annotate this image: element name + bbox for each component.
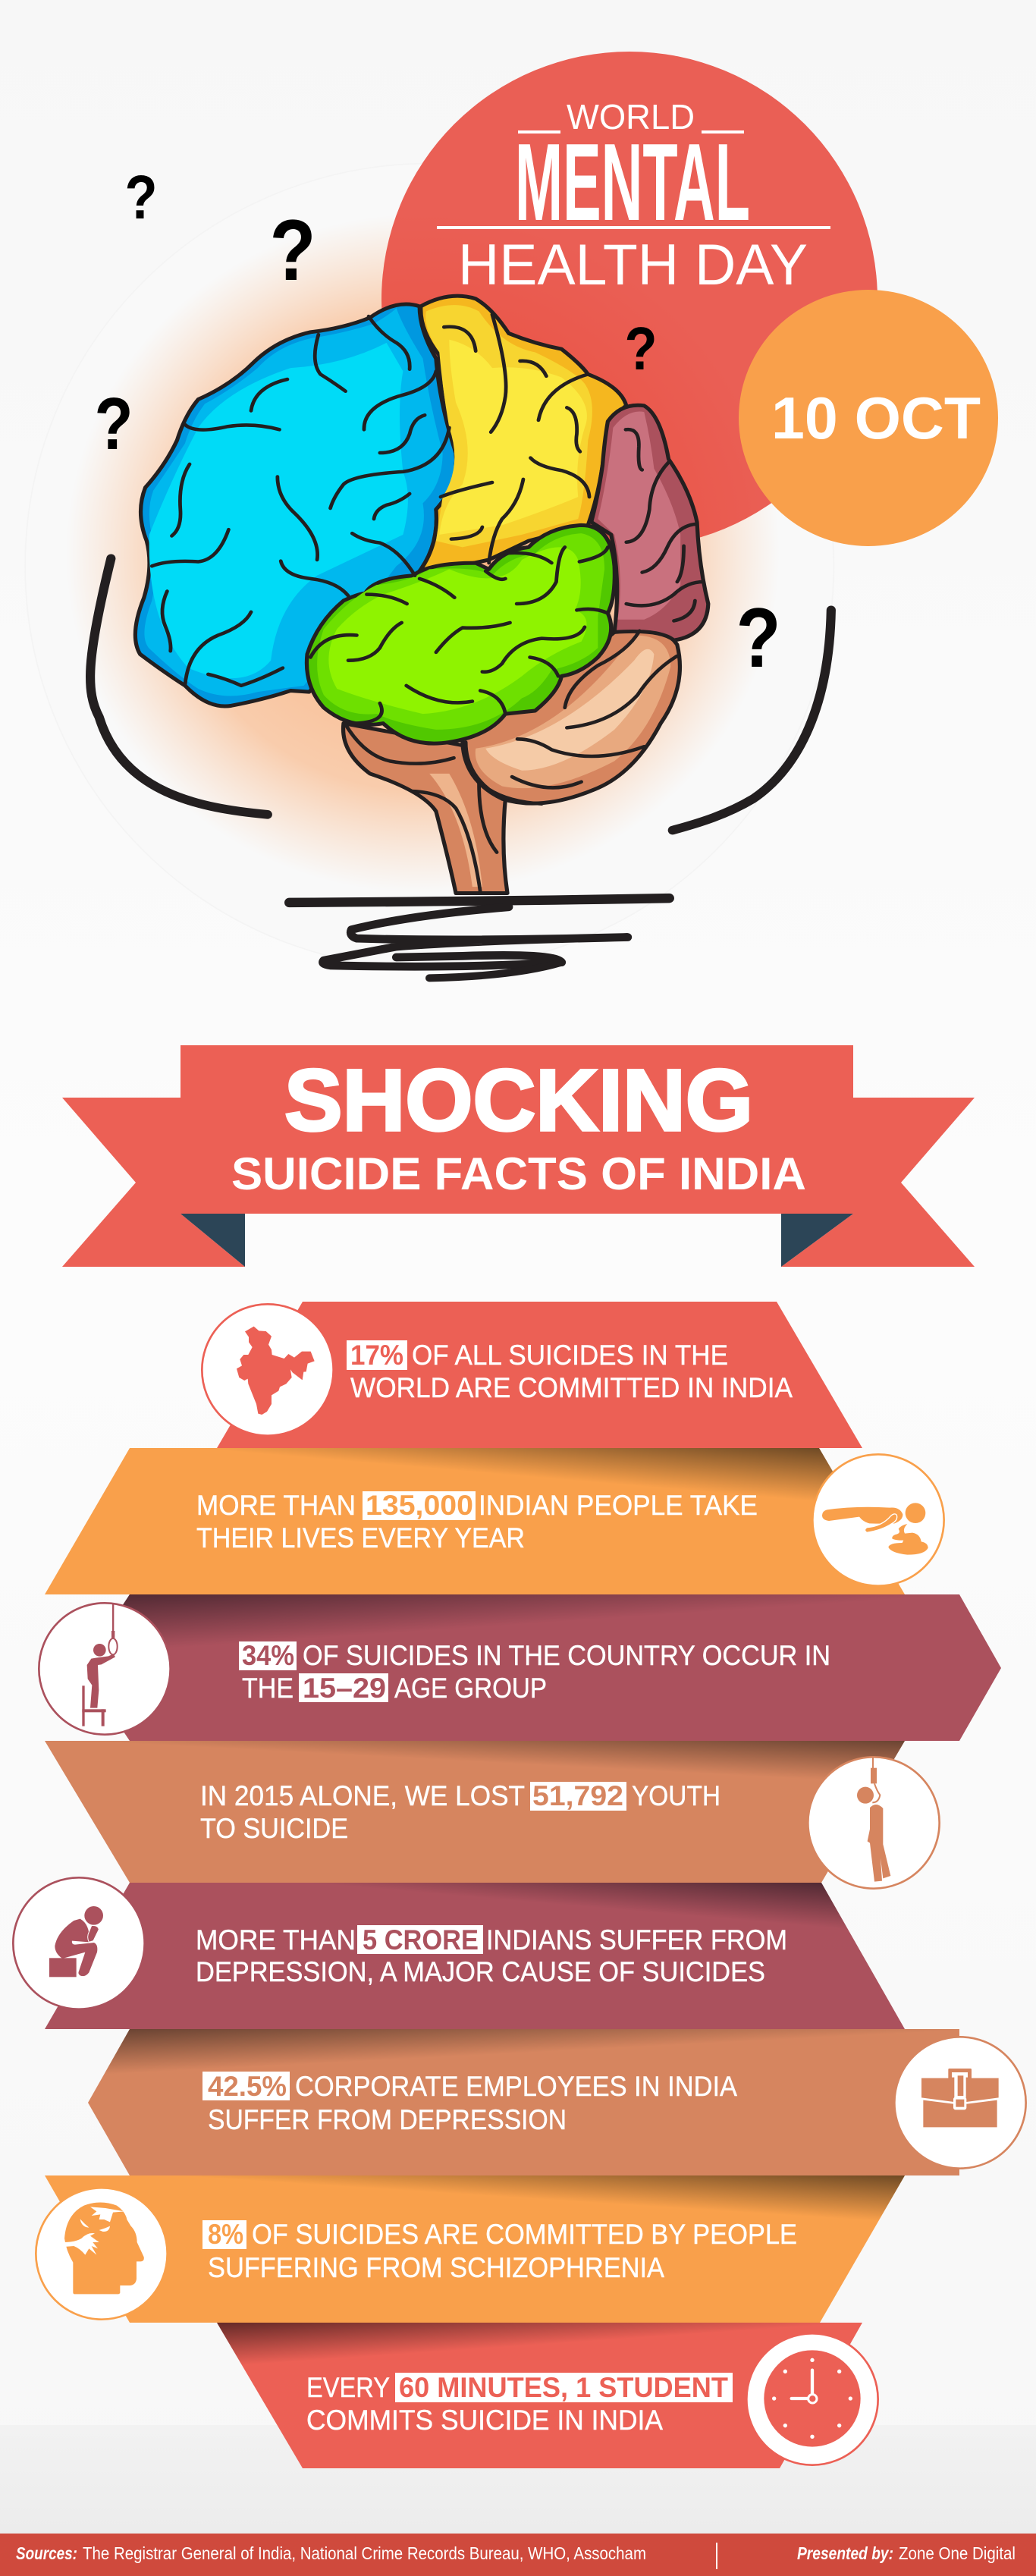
question marks: [94, 163, 781, 685]
question marks: ?: [270, 203, 316, 299]
fact 1 text: [347, 1340, 793, 1403]
fact 5 text: INDIANS SUFFER FROM: [486, 1924, 787, 1956]
brain fold lines: [152, 315, 704, 892]
fact 1 text: 17%: [350, 1340, 403, 1371]
fact 7 text: OF SUICIDES ARE COMMITTED BY PEOPLE: [252, 2219, 797, 2250]
green lobe: [306, 525, 614, 743]
fact 4 text: IN 2015 ALONE, WE LOST: [200, 1780, 525, 1811]
fact bars: [45, 1302, 1001, 2468]
question marks: ?: [736, 591, 781, 685]
date badge: 10 Oct: 10 OCT: [771, 385, 981, 451]
fact 8 text: [306, 2372, 733, 2436]
footer: sources and presenter: Presented by:: [797, 2543, 893, 2563]
heading ribbon: SUICIDE FACTS OF INDIA: [231, 1148, 806, 1199]
icon: hanging figure: [808, 1757, 940, 1889]
title: World Mental Health Day: HEALTH DAY: [458, 233, 808, 297]
fact 7 text: 8%: [208, 2219, 243, 2250]
icon: person on chair with noose: [39, 1603, 171, 1735]
question marks: ?: [124, 163, 158, 232]
title: World Mental Health Day: MENTAL: [515, 121, 750, 243]
yellow lobe: [416, 296, 626, 576]
icon: depressed seated figure: [13, 1877, 145, 2009]
fact 3 text: THE: [242, 1673, 294, 1704]
title: World Mental Health Day: WORLD: [567, 97, 695, 137]
fact 3 text: AGE GROUP: [394, 1673, 547, 1704]
date badge: 10 Oct: [739, 290, 998, 546]
title: World Mental Health Day: [437, 97, 830, 297]
mauve lobe: [592, 405, 708, 640]
fact 8 text: 60 MINUTES, 1 STUDENT: [399, 2372, 728, 2403]
fact 2 text: 135,000: [366, 1490, 473, 1521]
fact 4 text: 51,792: [532, 1780, 623, 1811]
fact 2 text: [196, 1490, 758, 1553]
question marks: ?: [625, 315, 657, 382]
fact 6 text: CORPORATE EMPLOYEES IN INDIA: [295, 2071, 737, 2102]
brain glow: [66, 214, 780, 893]
fact 5 text: DEPRESSION, A MAJOR CAUSE OF SUICIDES: [196, 1956, 765, 1987]
fact 3 text: 15–29: [303, 1673, 386, 1704]
fact 8 text: COMMITS SUICIDE IN INDIA: [306, 2405, 663, 2436]
fact 4 text: TO SUICIDE: [200, 1813, 348, 1844]
heading ribbon: SHOCKING: [284, 1052, 753, 1149]
question marks: ?: [94, 382, 133, 465]
icon: India map: [202, 1304, 334, 1436]
footer: sources and presenter: [0, 2534, 1036, 2576]
fact 6 text: SUFFER FROM DEPRESSION: [208, 2104, 567, 2135]
fact 3 text: 34%: [242, 1640, 294, 1671]
fact 5 text: [196, 1924, 787, 1987]
icon: person lying in blood: [812, 1454, 944, 1586]
fact 4 text: YOUTH: [632, 1780, 720, 1811]
icon: clock: [746, 2333, 878, 2465]
fact 3 text: OF SUICIDES IN THE COUNTRY OCCUR IN: [303, 1640, 830, 1671]
icon: briefcase: [894, 2037, 1026, 2169]
brain stem and cerebellum: [344, 628, 680, 893]
fact 6 text: [202, 2071, 737, 2135]
fact 1 text: WORLD ARE COMMITTED IN INDIA: [350, 1372, 793, 1403]
footer: sources and presenter: Sources:: [16, 2543, 77, 2563]
fact 7 text: SUFFERING FROM SCHIZOPHRENIA: [208, 2252, 664, 2283]
fact 7 text: [202, 2219, 797, 2283]
brain illustration: [135, 296, 708, 893]
icon: head with clawing hands: [36, 2188, 168, 2320]
fact 3 text: [239, 1640, 830, 1704]
badge: red circle: [381, 52, 877, 548]
fact 5 text: MORE THAN: [196, 1924, 356, 1956]
fact 2 text: INDIAN PEOPLE TAKE: [479, 1490, 758, 1521]
fact 6 text: 42.5%: [208, 2071, 287, 2102]
fact 2 text: THEIR LIVES EVERY YEAR: [196, 1522, 525, 1553]
fact 4 text: [200, 1780, 720, 1844]
fact 5 text: 5 CRORE: [363, 1924, 479, 1956]
fact 1 text: OF ALL SUICIDES IN THE: [412, 1340, 728, 1371]
scribble under brain and side arcs: [90, 558, 831, 978]
heading ribbon: [62, 1045, 975, 1267]
fact 2 text: MORE THAN: [196, 1490, 356, 1521]
blue lobe: [135, 304, 457, 706]
fact 8 text: EVERY: [306, 2372, 390, 2403]
footer: sources and presenter: Zone One Digital: [899, 2543, 1016, 2563]
footer: sources and presenter: The Registrar General of India, National Crime Records Bureau, WHO, Assocham: [83, 2543, 646, 2563]
